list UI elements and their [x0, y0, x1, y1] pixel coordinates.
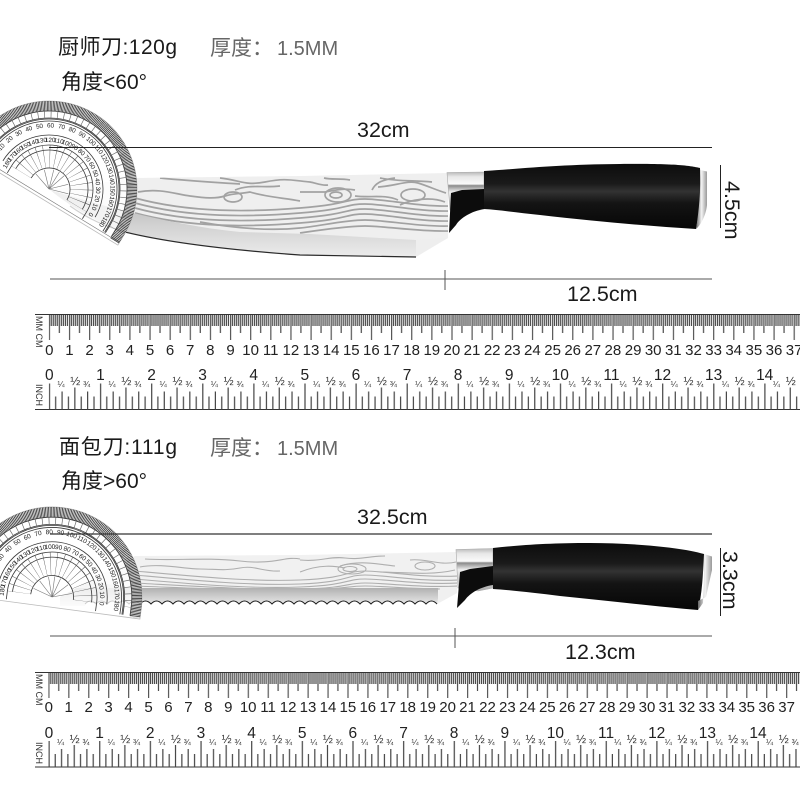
- ruler: chef knife: [34, 314, 800, 410]
- centimetre numbers: 14: [320, 699, 336, 716]
- centimetre numbers: 33: [705, 342, 722, 359]
- inch numbers: 7: [403, 367, 411, 384]
- label: 4.5cm: [720, 181, 744, 240]
- inch numbers: 13: [705, 367, 722, 384]
- dimension line: [49, 146, 712, 148]
- dimension line: [720, 165, 722, 228]
- centimetre numbers: 16: [359, 699, 376, 716]
- centimetre numbers: 24: [519, 699, 536, 716]
- centimetre numbers: 18: [403, 342, 420, 359]
- centimetre numbers: 0: [45, 342, 53, 359]
- outer scale numbers: 120: [99, 153, 110, 166]
- centimetre numbers: 17: [379, 699, 396, 716]
- centimetre numbers: 18: [399, 699, 416, 716]
- inner scale numbers: 100: [61, 139, 73, 149]
- thickness: bread knife: 厚度：: [210, 437, 273, 460]
- unit: mm cm: MM CM: [34, 316, 44, 348]
- inner scale numbers: 150: [7, 560, 19, 573]
- centimetre numbers: 37: [778, 699, 795, 716]
- inch numbers: 13: [699, 725, 716, 742]
- outer scale numbers: 50: [13, 538, 23, 547]
- centimetre numbers: 5: [146, 342, 154, 359]
- bolster: [447, 172, 484, 212]
- outer scale numbers: 170: [102, 206, 113, 219]
- centimetre numbers: 13: [303, 342, 319, 359]
- quarter-inch fractions: ¼¼¼¼¼¼¼¼¼¼¼¼¼¼¼: [57, 379, 781, 389]
- outer scale numbers: [0, 521, 128, 612]
- handle: [484, 164, 700, 229]
- outer scale numbers: [0, 98, 140, 229]
- centimetre numbers: 36: [758, 699, 775, 716]
- outer scale numbers: 70: [34, 530, 43, 538]
- inner scale numbers: 160: [12, 145, 25, 157]
- dimension: handle width 3.3cm: [718, 548, 742, 616]
- inch numbers: 0: [45, 725, 54, 742]
- outer scale numbers: 60: [47, 122, 55, 130]
- centimetre numbers: 19: [419, 699, 436, 716]
- centimetre numbers: 31: [659, 699, 675, 716]
- ruler lines: [35, 314, 800, 410]
- dimension: handle width 4.5cm: [720, 165, 744, 240]
- inner scale numbers: 70: [70, 548, 80, 558]
- centre fan: [0, 126, 135, 243]
- illustration: chef knife: [50, 164, 707, 257]
- centimetre numbers: 35: [746, 342, 762, 359]
- inch numbers: 12: [654, 367, 671, 384]
- centimetre numbers: 11: [263, 342, 278, 359]
- inner scale numbers: 10: [89, 202, 99, 212]
- outer scale numbers: 140: [101, 556, 112, 569]
- centimetre numbers: 6: [166, 342, 174, 359]
- dimension line: [50, 270, 712, 290]
- centimetre numbers: 25: [544, 342, 561, 359]
- inch numbers: 10: [552, 367, 569, 384]
- centimetre numbers: 36: [766, 342, 782, 359]
- inch ticks: [49, 380, 800, 410]
- centimetre numbers: 8: [204, 699, 212, 716]
- centimetre numbers: 22: [484, 342, 501, 359]
- inch numbers: 6: [352, 367, 360, 384]
- inner scale numbers: 0: [97, 601, 105, 606]
- inner scale numbers: 110: [53, 137, 65, 146]
- label: 3.3cm: [718, 551, 742, 610]
- dimension line: [50, 533, 712, 535]
- thickness: chef knife: 1.5MM: [277, 38, 338, 60]
- finger guard: [457, 566, 493, 608]
- bevel: [50, 190, 416, 257]
- centimetre numbers: 25: [539, 699, 556, 716]
- three-quarter-inch fractions: ¾¾¾¾¾¾¾¾¾¾¾¾¾¾: [83, 379, 755, 389]
- inch numbers: [45, 725, 767, 742]
- inch numbers: 5: [300, 367, 309, 384]
- inch numbers: 7: [399, 725, 408, 742]
- thickness: chef knife: 厚度：: [210, 37, 273, 60]
- centimetre numbers: 10: [242, 342, 259, 359]
- unit: mm cm: MM CM: [34, 674, 44, 706]
- label: 12.3cm: [565, 640, 636, 664]
- outer scale numbers: 110: [92, 144, 104, 156]
- outer scale numbers: 150: [108, 185, 116, 196]
- three-quarter-inch fractions: ¾¾¾¾¾¾¾¾¾¾¾¾¾¾¾: [82, 737, 799, 747]
- inch numbers: 3: [197, 725, 205, 742]
- centimetre numbers: 1: [65, 699, 73, 716]
- inch numbers: [45, 367, 774, 384]
- inner scale numbers: 140: [12, 554, 25, 567]
- centimetre numbers: 7: [184, 699, 193, 716]
- centimetre numbers: 0: [45, 699, 53, 716]
- dimension: handle length 12.3cm: [50, 628, 712, 664]
- centimetre numbers: 15: [340, 699, 356, 716]
- half-inch fractions: ½½½½½½½½½½½½½½½: [70, 374, 796, 388]
- inch numbers: 1: [96, 367, 105, 384]
- dimension: handle length 12.5cm: [50, 270, 712, 306]
- centimetre numbers: 27: [584, 342, 601, 359]
- inner scale numbers: 90: [69, 143, 80, 153]
- centimetre numbers: 12: [283, 342, 299, 359]
- inner scale numbers: 100: [44, 544, 56, 551]
- inch numbers: 11: [603, 367, 619, 384]
- centimetre numbers: 22: [479, 699, 496, 716]
- inner scale numbers: 180: [2, 157, 14, 170]
- white scallop mask: [85, 601, 437, 610]
- label: 12.5cm: [567, 282, 638, 306]
- centimetre numbers: 21: [464, 342, 480, 359]
- outer scale numbers: 20: [5, 135, 15, 145]
- inch ticks: [48, 737, 800, 767]
- centimetre numbers: 28: [599, 699, 615, 716]
- outer hatch band: [0, 502, 147, 617]
- centimetre numbers: 4: [124, 699, 133, 716]
- unit: inch: INCH: [34, 742, 44, 764]
- outer scale numbers: 70: [57, 123, 66, 131]
- outer scale numbers: 80: [46, 529, 53, 536]
- inner scale numbers: 170: [7, 150, 19, 163]
- centimetre numbers: 14: [323, 342, 339, 359]
- dimension line: [50, 628, 712, 648]
- centimetre numbers: 32: [679, 699, 695, 716]
- inner scale numbers: 110: [36, 544, 48, 553]
- ruler: bread knife: [34, 672, 800, 767]
- damascus pattern: [135, 556, 458, 590]
- centimetre numbers: 29: [625, 342, 641, 359]
- cutting edge: [70, 206, 416, 257]
- inner scale numbers: 20: [96, 582, 105, 591]
- inner scale numbers: 50: [91, 169, 100, 178]
- inner scale numbers: 60: [87, 161, 97, 171]
- angle: bread knife: 角度>60°: [61, 470, 147, 493]
- ruler lines: [35, 672, 800, 767]
- heel: [437, 588, 457, 604]
- centimetre numbers: 30: [645, 342, 662, 359]
- inch numbers: 11: [598, 725, 614, 742]
- inch numbers: 6: [348, 725, 357, 742]
- inner scale numbers: 120: [27, 546, 40, 556]
- inch numbers: 1: [95, 725, 104, 742]
- damascus pattern: [135, 178, 450, 233]
- inner scale numbers: 60: [77, 553, 88, 563]
- outer scale numbers: 90: [57, 529, 65, 537]
- protractor: chef knife: [0, 68, 170, 245]
- inner scale numbers: 40: [93, 178, 101, 186]
- centimetre numbers: 3: [104, 699, 113, 716]
- inner scale numbers: 10: [98, 591, 105, 599]
- centimetre numbers: 33: [698, 699, 715, 716]
- centimetre numbers: [45, 342, 800, 359]
- centre fan: [33, 574, 74, 600]
- unit: inch: INCH: [34, 384, 44, 406]
- centimetre numbers: 20: [439, 699, 456, 716]
- inner scale numbers: [2, 117, 121, 221]
- label: 32cm: [357, 118, 410, 142]
- centimetre numbers: 28: [605, 342, 621, 359]
- inch numbers: 8: [454, 367, 462, 384]
- inner scale numbers: 140: [27, 138, 40, 148]
- protractor body: [0, 68, 170, 245]
- dimension line: [720, 548, 722, 616]
- centimetre numbers: 4: [126, 342, 134, 359]
- centimetre numbers: 20: [444, 342, 460, 359]
- inch numbers: 9: [500, 725, 509, 742]
- centimetre numbers: 10: [240, 699, 257, 716]
- outer scale numbers: 170: [113, 589, 120, 600]
- inner scale numbers: 40: [89, 566, 99, 576]
- end cap: [696, 170, 707, 229]
- radial lines: [21, 144, 94, 206]
- inner scale numbers: 150: [19, 141, 33, 152]
- centimetre numbers: 34: [725, 342, 742, 359]
- inch numbers: 0: [45, 367, 54, 384]
- end cap: [698, 554, 712, 610]
- centimetre numbers: [45, 699, 795, 716]
- centimetre numbers: 5: [144, 699, 153, 716]
- blade: [50, 173, 448, 257]
- inch numbers: 9: [505, 367, 514, 384]
- serrated edge: [85, 601, 437, 604]
- bolster: [456, 548, 493, 591]
- centimetre numbers: 8: [206, 342, 214, 359]
- illustration: bread knife: [60, 543, 712, 610]
- outer scale numbers: 30: [14, 129, 24, 138]
- inch numbers: 4: [249, 367, 258, 384]
- outer scale numbers: 90: [77, 130, 87, 140]
- centimetre numbers: 9: [226, 342, 235, 359]
- centimetre numbers: 15: [343, 342, 360, 359]
- inner scale numbers: 30: [93, 573, 103, 583]
- inner scale numbers: 130: [36, 137, 48, 145]
- scale rings: [0, 82, 156, 236]
- outer hatch band: [0, 75, 163, 241]
- centimetre numbers: 29: [619, 699, 635, 716]
- centimetre numbers: 17: [383, 342, 400, 359]
- inner scale numbers: 90: [55, 544, 63, 552]
- centimetre numbers: 26: [559, 699, 576, 716]
- protractor: bread knife: [0, 496, 153, 619]
- finger guard: [449, 189, 484, 233]
- outer scale numbers: 100: [65, 531, 78, 541]
- outer scale numbers: 40: [4, 544, 14, 554]
- outer scale numbers: 60: [23, 533, 32, 542]
- scale rings: [0, 507, 142, 616]
- centimetre numbers: 3: [106, 342, 114, 359]
- centimetre numbers: 24: [524, 342, 541, 359]
- inch numbers: 12: [648, 725, 665, 742]
- centimetre numbers: 13: [300, 699, 316, 716]
- outer scale numbers: 130: [104, 163, 114, 175]
- inch numbers: 10: [547, 725, 564, 742]
- inner scale numbers: 80: [76, 148, 86, 158]
- title: chef knife weight: 厨师刀:120g: [58, 36, 177, 59]
- inner scale numbers: 20: [92, 194, 101, 203]
- half-inch fractions: ½½½½½½½½½½½½½½½: [70, 732, 789, 746]
- outer scale numbers: 80: [67, 126, 77, 135]
- centimetre numbers: 6: [164, 699, 173, 716]
- inner scale numbers: 0: [86, 211, 94, 218]
- inch numbers: 14: [749, 725, 767, 742]
- outer scale numbers: 160: [110, 577, 120, 590]
- bevel: [64, 588, 438, 603]
- inch numbers: 14: [756, 367, 774, 384]
- title: bread knife weight: 面包刀:111g: [59, 436, 177, 459]
- radial lines: [19, 560, 89, 601]
- thickness: bread knife: 1.5MM: [277, 438, 338, 460]
- centimetre numbers: 7: [186, 342, 194, 359]
- inch numbers: 5: [298, 725, 307, 742]
- centimetre numbers: 35: [738, 699, 755, 716]
- outer scale numbers: 180: [97, 216, 109, 229]
- outer scale numbers: 180: [112, 600, 120, 612]
- quarter-inch fractions: ¼¼¼¼¼¼¼¼¼¼¼¼¼¼¼: [57, 737, 774, 747]
- centimetre numbers: 32: [685, 342, 702, 359]
- centimetre numbers: 34: [718, 699, 735, 716]
- outer scale numbers: 160: [106, 196, 115, 208]
- outer scale numbers: 130: [93, 547, 106, 560]
- centimetre numbers: 23: [499, 699, 516, 716]
- centimetre numbers: 1: [65, 342, 74, 359]
- centimetre numbers: 27: [579, 699, 596, 716]
- outer scale numbers: 150: [106, 566, 117, 579]
- inner scale numbers: 160: [2, 567, 14, 580]
- inch numbers: 3: [198, 367, 207, 384]
- centimetre numbers: 11: [260, 699, 276, 716]
- band dividers: [0, 511, 138, 607]
- handle: [493, 543, 704, 610]
- centimetre numbers: 12: [280, 699, 296, 716]
- centimetre numbers: 2: [85, 342, 94, 359]
- centimetre ticks: [48, 673, 800, 699]
- centimetre ticks: [49, 315, 800, 341]
- outer scale numbers: 100: [84, 136, 97, 148]
- inner scale numbers: 80: [63, 545, 72, 554]
- inner scale numbers: [0, 537, 112, 609]
- outer scale numbers: 120: [85, 540, 98, 552]
- heel: [416, 238, 446, 257]
- outer scale numbers: 50: [36, 123, 44, 131]
- angle: chef knife: 角度<60°: [61, 71, 147, 94]
- inner scale numbers: 70: [82, 154, 92, 164]
- label: 32.5cm: [357, 505, 428, 529]
- outer scale numbers: 140: [107, 174, 116, 186]
- centimetre numbers: 2: [85, 699, 93, 716]
- blade: [60, 552, 457, 606]
- inch numbers: 8: [450, 725, 458, 742]
- outer scale numbers: 110: [76, 534, 88, 546]
- inner scale numbers: 120: [45, 137, 56, 144]
- centimetre numbers: 19: [423, 342, 440, 359]
- inner scale numbers: 30: [94, 187, 101, 194]
- centimetre numbers: 23: [504, 342, 521, 359]
- inch numbers: 2: [147, 367, 156, 384]
- inner scale numbers: 50: [84, 559, 94, 569]
- inner scale numbers: 170: [0, 575, 10, 588]
- centimetre numbers: 21: [459, 699, 476, 716]
- inner scale numbers: 130: [19, 549, 32, 561]
- inch numbers: 2: [146, 725, 155, 742]
- outer scale numbers: 40: [24, 125, 34, 134]
- inch numbers: 4: [247, 725, 256, 742]
- band dividers: [0, 87, 151, 228]
- centimetre numbers: 16: [363, 342, 380, 359]
- centimetre numbers: 30: [639, 699, 655, 716]
- centimetre numbers: 9: [224, 699, 232, 716]
- centimetre numbers: 26: [564, 342, 581, 359]
- protractor face: [0, 496, 153, 619]
- centimetre numbers: 31: [665, 342, 682, 359]
